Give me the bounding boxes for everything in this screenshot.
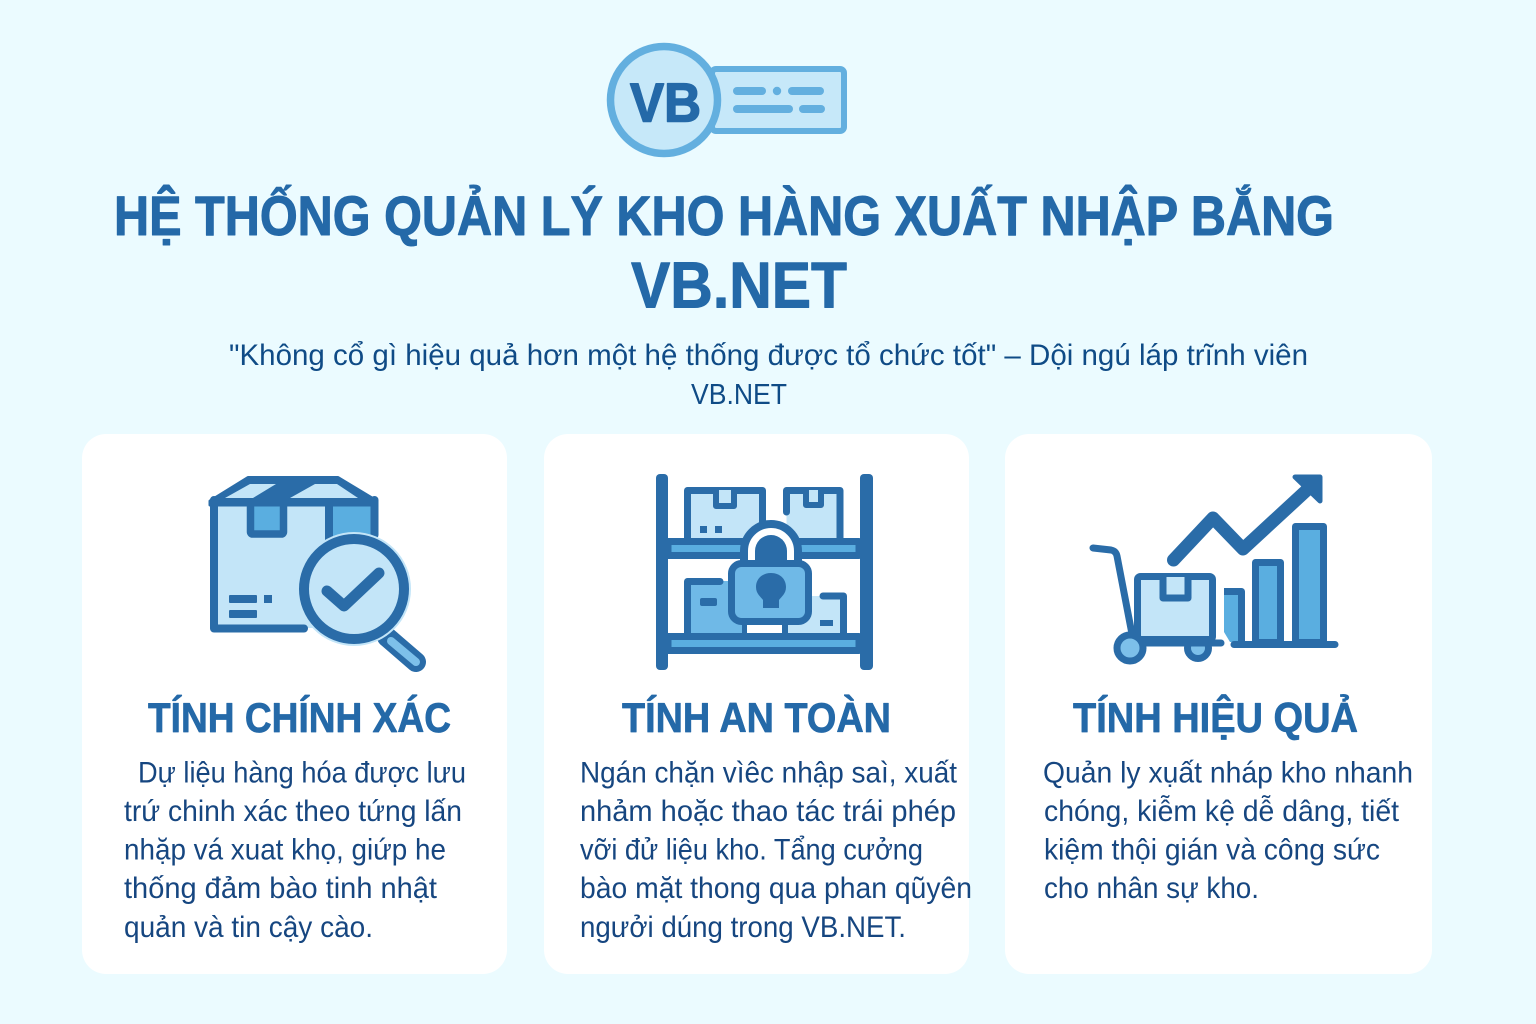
subtitle quote: "Không cổ gì hiệu quả hơn một hệ thống được tổ chức tốt" – Dội ngú láp trĩnh viên — [229, 339, 1308, 372]
text block: chóng, kiễm kệ dễ dâng, tiết — [1044, 795, 1400, 828]
text block: thống đảm bào tinh nhật — [124, 872, 438, 905]
text block: Dự liệu hàng hóa được lưu — [138, 756, 466, 790]
text block: cho nhân sự kho. — [1044, 872, 1259, 905]
icon: shelf with lock — [656, 474, 873, 670]
text block: ngưởi dúng trong VB.NET. — [580, 911, 906, 944]
icon: cart with rising chart — [1093, 477, 1335, 661]
icon: box with magnifier check — [210, 478, 416, 662]
text block: quản và tin cậy cào. — [124, 911, 373, 944]
text block: nhảm hoặc thao tác trái phép — [580, 795, 956, 828]
title — [114, 184, 1334, 322]
text block: kiệm thội gián và công sức — [1044, 834, 1380, 866]
text block: Ngán chặn vìêc nhập saì, xuất — [580, 756, 958, 790]
text block: trứ chinh xác theo tứng lấn — [124, 795, 462, 828]
text block: bào mặt thong qua phan qũyên — [580, 872, 972, 905]
logo: VB badge — [610, 46, 844, 154]
heading: TÍNH HIỆU QUẢ — [1073, 693, 1358, 741]
text block: vỡi đử liệu kho. Tẩng cưởng — [580, 834, 923, 866]
text block: nhặp vá xuat khọ, giứp he — [124, 834, 446, 866]
logo: VB badge: VB — [630, 72, 701, 134]
heading: TÍNH AN TOÀN — [622, 694, 891, 741]
text block: Quản ly xụất nháp kho nhanh — [1043, 756, 1413, 790]
text block — [1043, 756, 1413, 905]
text block — [580, 756, 972, 944]
heading: TÍNH CHÍNH XÁC — [148, 694, 451, 741]
subtitle quote: VB.NET — [691, 379, 787, 411]
text block — [124, 756, 466, 944]
panel: tính chính xác — [82, 434, 507, 974]
title: HỆ THỐNG QUẢN LÝ KHO HÀNG XUẤT NHẬP BẮNG — [114, 184, 1334, 247]
title: VB.NET — [631, 248, 847, 322]
subtitle quote — [229, 339, 1308, 411]
panel: tính an toàn — [544, 434, 972, 974]
panel: tính hiệu quả — [1005, 434, 1432, 974]
